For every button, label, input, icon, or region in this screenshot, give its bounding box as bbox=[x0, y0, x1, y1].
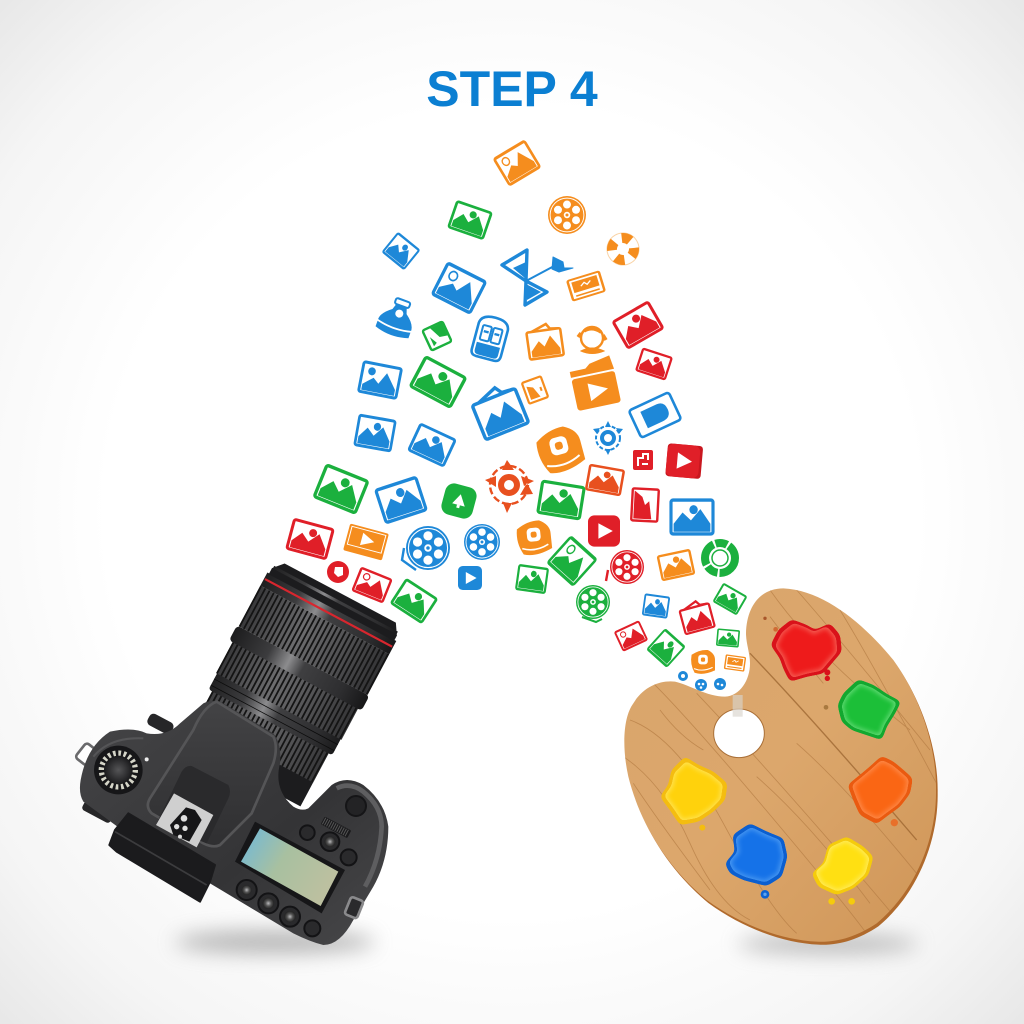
icon: small red badge bbox=[633, 450, 653, 470]
icon: green picture bbox=[391, 579, 437, 623]
icon: blue play bbox=[458, 566, 482, 590]
icon: blue folder picture bbox=[469, 381, 529, 440]
palette shadow bbox=[738, 934, 918, 954]
wheel bbox=[321, 816, 351, 838]
icon: red-orange target bbox=[485, 460, 534, 513]
blue paint bbox=[725, 823, 787, 899]
left strap lug bbox=[75, 742, 98, 766]
icon: green small picture bbox=[717, 629, 739, 647]
icon: red picture bbox=[353, 568, 391, 602]
icon: blue picture bbox=[383, 233, 419, 269]
icon: orange tablet bbox=[725, 655, 745, 671]
tape bbox=[733, 695, 743, 717]
icon: red picture bbox=[287, 519, 333, 559]
icon: dark red small picture bbox=[636, 349, 672, 379]
gold paint bbox=[660, 757, 727, 831]
icon: blue small picture bbox=[643, 594, 669, 618]
icon: orange-red picture bbox=[586, 465, 624, 495]
icon: blue film reel bbox=[464, 524, 500, 560]
icon: green ring bbox=[705, 543, 735, 573]
icon: blue monitor picture bbox=[409, 424, 455, 466]
icon: blue compass bbox=[593, 421, 623, 455]
icon: green rounded badge bbox=[439, 481, 479, 521]
icon: blue backpack bbox=[470, 314, 510, 362]
icon: green picture bbox=[714, 584, 746, 614]
icon: green square badge bbox=[422, 321, 452, 351]
palette board bbox=[624, 588, 936, 942]
shutter button bbox=[346, 796, 366, 816]
icon: orange astronaut head bbox=[578, 327, 606, 354]
picture icons stream bbox=[287, 141, 746, 691]
icon: orange tablet bbox=[567, 271, 605, 301]
icon: blue film reel with tail bbox=[402, 526, 450, 570]
icon: blue dot bbox=[714, 678, 726, 690]
palette rim bbox=[626, 591, 938, 945]
icon: green picture bbox=[516, 565, 548, 593]
icon: blue picture bbox=[376, 477, 426, 523]
top knob bbox=[146, 712, 175, 736]
icon: orange play picture bbox=[343, 523, 389, 561]
camera shadow bbox=[175, 930, 375, 954]
icon: red picture bbox=[631, 488, 659, 522]
icon: blue hourglass and arrow bbox=[502, 250, 573, 305]
icon: red folder picture bbox=[678, 598, 715, 634]
eyepiece bbox=[109, 813, 215, 902]
icon: red play box bbox=[588, 515, 620, 547]
icon: green film reel bbox=[576, 585, 610, 622]
icon: blue dot bbox=[695, 679, 707, 691]
yellow paint bbox=[812, 837, 873, 905]
icon: small orange picture bbox=[522, 376, 548, 404]
wood grain bbox=[623, 590, 940, 943]
icon: blue picture bbox=[358, 362, 402, 398]
icon: orange folder picture bbox=[526, 322, 564, 360]
camera lens bbox=[176, 557, 406, 811]
mode dial bbox=[94, 746, 149, 794]
icon: orange play folder bbox=[568, 355, 621, 411]
camera bbox=[75, 557, 406, 945]
hot shoe bbox=[156, 793, 213, 847]
palette bbox=[623, 588, 940, 945]
icon: red picture bbox=[615, 621, 647, 651]
icon: blue dot bbox=[678, 671, 688, 681]
orange paint bbox=[848, 756, 913, 826]
icon: red round play bbox=[327, 561, 349, 583]
icon: orange lifebuoy bbox=[603, 229, 643, 269]
icon: green diamond picture bbox=[548, 537, 596, 585]
title: STEP 4 bbox=[426, 61, 598, 117]
icon: orange book bbox=[533, 423, 587, 477]
icon: green picture bbox=[410, 357, 466, 407]
side knob bbox=[81, 800, 114, 824]
icon: orange picture bbox=[658, 550, 694, 580]
icon: green picture bbox=[538, 481, 584, 519]
icon: blue large picture bbox=[432, 263, 486, 313]
icon: red play bbox=[665, 443, 703, 479]
hot shoe hump bbox=[157, 766, 230, 843]
icon: red film reel bbox=[606, 550, 644, 584]
lcd screen bbox=[235, 822, 345, 913]
icon: blue speech tablet bbox=[629, 392, 681, 438]
icon: orange badge bbox=[691, 650, 715, 674]
icon: green diamond picture bbox=[648, 630, 684, 666]
icon: orange picture bbox=[494, 141, 540, 185]
icon: orange film reel bbox=[548, 196, 586, 234]
red paint bbox=[763, 617, 842, 682]
right strap lug bbox=[344, 897, 364, 919]
control buttons bbox=[237, 825, 357, 936]
icon: blue picture bbox=[671, 500, 713, 534]
prism hump bbox=[148, 702, 276, 846]
icon: green picture bbox=[449, 201, 491, 239]
icon: blue easel picture bbox=[355, 415, 395, 451]
camera body bbox=[75, 701, 388, 945]
green paint bbox=[824, 679, 901, 740]
icon: blue flask bbox=[374, 294, 421, 341]
thumb hole bbox=[714, 709, 764, 758]
icon: orange book bbox=[515, 519, 553, 556]
icon: red picture bbox=[613, 302, 663, 348]
icon: green picture bbox=[314, 465, 368, 513]
